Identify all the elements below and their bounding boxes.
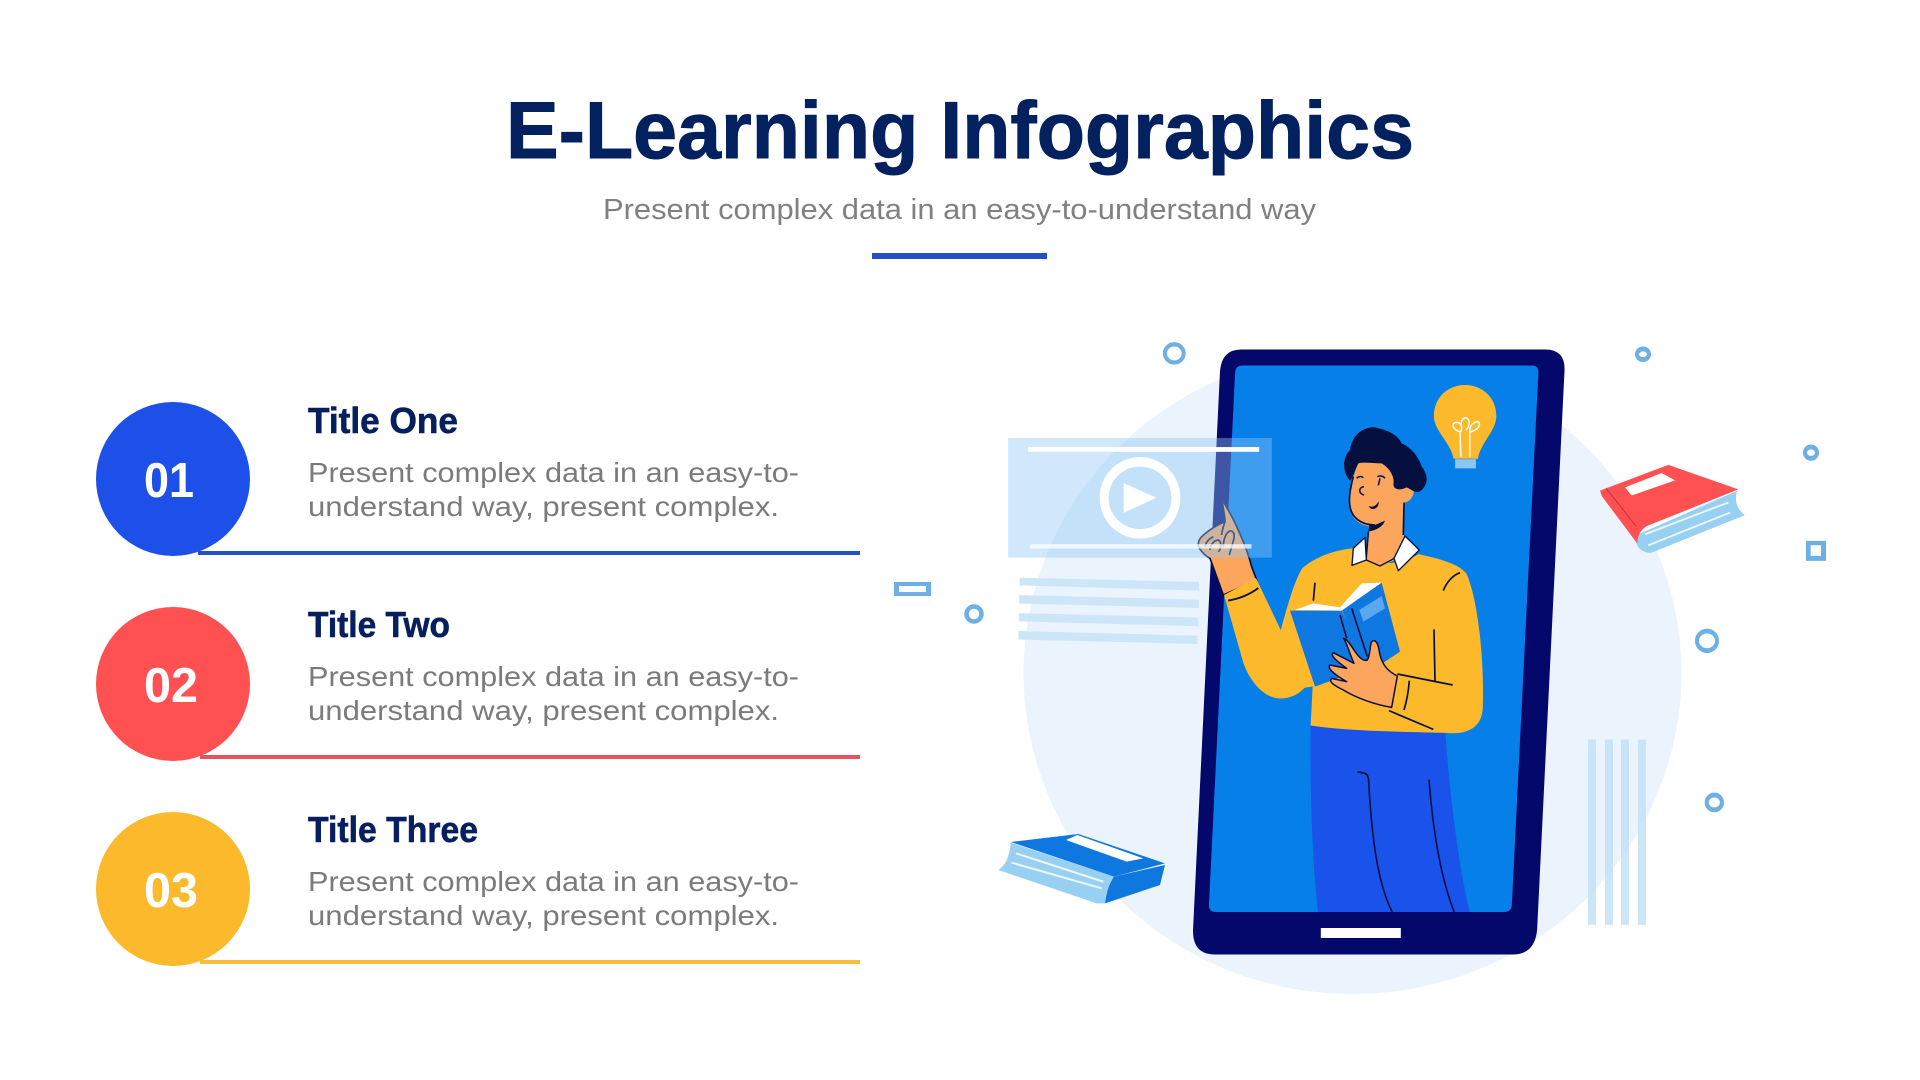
ring left [966, 606, 982, 622]
ring 1 [1637, 349, 1649, 360]
smile [1368, 501, 1379, 509]
item heading 03: Title Three [308, 809, 478, 850]
phone body [1193, 349, 1565, 954]
collar [1352, 536, 1419, 571]
ring top-left [1165, 344, 1184, 362]
number badge 03 [96, 812, 250, 966]
subtitle: Present complex data in an easy-to-understand way [603, 194, 1317, 226]
light bulb [1434, 385, 1496, 468]
chin shadow [1368, 521, 1385, 532]
bar pattern [1588, 740, 1646, 925]
ring 4 [1707, 795, 1722, 810]
head and collar [1344, 427, 1427, 571]
rule 01 [198, 551, 860, 555]
item body 02: understand way, present complex. [308, 695, 779, 726]
title: E-Learning Infographics [506, 86, 1414, 176]
ring 2 [1805, 447, 1817, 458]
face and neck [1350, 463, 1414, 566]
number badge 02 [96, 607, 250, 761]
book page edge [1295, 583, 1382, 611]
item body 02 [308, 661, 799, 726]
red book [1600, 465, 1745, 553]
item body 01: Present complex data in an easy-to- [308, 457, 799, 488]
phone [1193, 349, 1565, 954]
sweater lines [1313, 573, 1460, 729]
item body 02: Present complex data in an easy-to- [308, 661, 799, 692]
square marker [1806, 541, 1826, 561]
number badge 01 [96, 402, 250, 556]
text lines [1018, 578, 1199, 644]
rule 02 [200, 755, 860, 759]
list item 02 [96, 604, 860, 761]
floating video panel [1008, 438, 1272, 558]
teacher figure [1198, 427, 1483, 912]
overlay panels [1008, 344, 1272, 644]
blue book [998, 834, 1165, 903]
jaw and neck outline [1349, 477, 1404, 560]
item body 03: understand way, present complex. [308, 900, 779, 931]
phone screen [1209, 366, 1538, 912]
decorations right [1588, 349, 1826, 925]
number badge 02: 02 [144, 659, 198, 713]
trousers [1310, 725, 1470, 912]
number badge 03: 03 [144, 864, 198, 918]
item body 03 [308, 866, 799, 931]
rule 03 [200, 960, 860, 964]
book pages left [1290, 611, 1370, 687]
ring 3 [1697, 631, 1717, 651]
item body 01: understand way, present complex. [308, 491, 779, 522]
dash marker left [894, 582, 931, 596]
pointing hand [1198, 499, 1257, 595]
list item 03 [96, 809, 860, 966]
item heading 01: Title One [308, 400, 458, 441]
number badge 01: 01 [144, 454, 194, 508]
sweater [1224, 548, 1483, 733]
facial features [1357, 476, 1385, 495]
background circle [1024, 352, 1682, 994]
list item 01 [96, 400, 860, 556]
book cover right [1342, 583, 1400, 665]
title accent bar [872, 253, 1047, 259]
item body 03: Present complex data in an easy-to- [308, 866, 799, 897]
item heading 02: Title Two [308, 604, 450, 645]
hair [1344, 427, 1427, 492]
book label [1359, 596, 1385, 622]
play button [1104, 462, 1176, 534]
item body 01 [308, 457, 799, 522]
held book and hand [1290, 573, 1460, 729]
holding hand [1329, 638, 1397, 707]
home button [1321, 928, 1401, 938]
